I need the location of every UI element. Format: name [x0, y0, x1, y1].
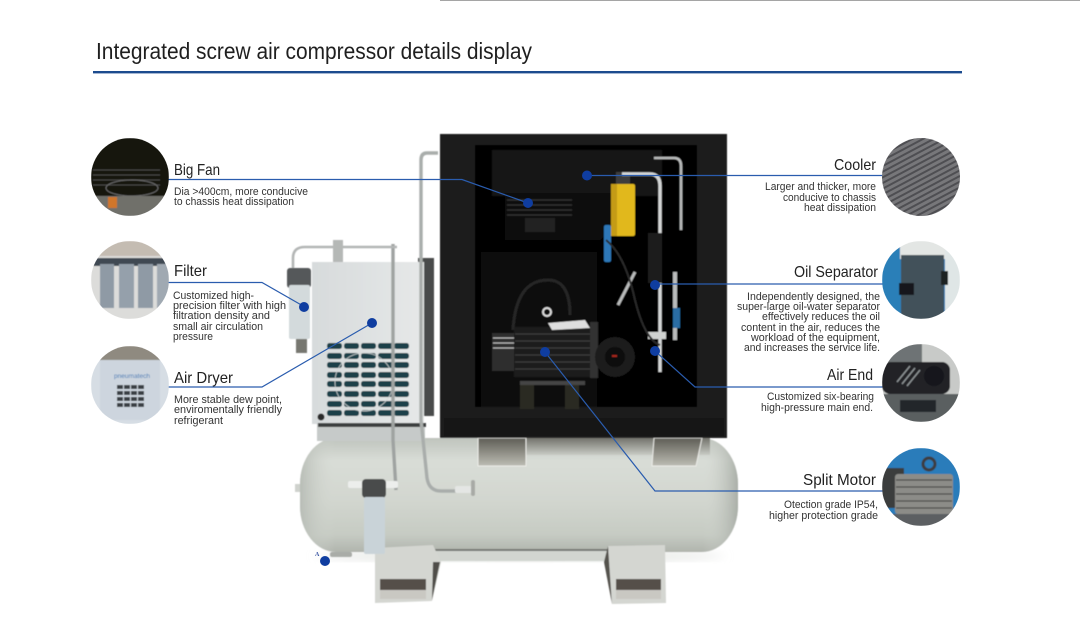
text: split motor description: Otection grade IP54,: [784, 499, 878, 511]
line: cooler: [587, 174, 883, 176]
air dryer: [312, 258, 434, 441]
stray letter mark: A: [315, 552, 320, 558]
heading: air end: Air End: [827, 367, 873, 384]
drain fitting: [455, 480, 475, 496]
line: split motor: [545, 352, 883, 491]
icon: oil separator photo: [882, 241, 960, 319]
inline filter: [287, 268, 311, 353]
callout lines: [168, 176, 883, 491]
bright pipes: [622, 174, 660, 372]
text: air end description: [761, 391, 874, 414]
line: oil separator: [655, 283, 883, 285]
text: cooler description: Larger and thicker, more: [765, 181, 876, 193]
icon: filter photo: [91, 241, 169, 319]
title underline: [93, 71, 962, 73]
panel: air end: [761, 344, 960, 422]
heading: filter: Filter: [174, 263, 208, 280]
motor: [492, 308, 635, 409]
text: air dryer description: enviromentally friendly: [174, 404, 282, 416]
text: big fan description: [174, 186, 308, 208]
text: air dryer description: More stable dew point,: [174, 394, 282, 406]
callout dots: [299, 170, 660, 566]
left foot: [375, 545, 441, 603]
dot: air dryer: [367, 318, 377, 328]
icon: air dryer photo: [91, 346, 169, 424]
upper black plate: [492, 150, 662, 196]
panel: big fan: [91, 138, 308, 216]
air tank: [295, 438, 738, 561]
motor cable: [513, 280, 570, 330]
dot: filter: [299, 302, 309, 312]
fan: [505, 193, 615, 240]
icon: air dryer photo: pneumatech: [114, 374, 150, 380]
text: filter description: small air circulation: [173, 321, 263, 333]
text: cooler description: heat dissipation: [804, 202, 876, 214]
text: air end description: high-pressure main end.: [761, 402, 873, 414]
panel: air dryer: [91, 346, 282, 427]
air compressor machine: [287, 134, 738, 604]
icon: air end photo: [882, 344, 960, 422]
text: oil separator description: content in the air, reduces the: [741, 322, 880, 334]
heading: air dryer: Air Dryer: [174, 370, 234, 387]
text: oil separator description: super-large oil-water separator: [737, 301, 880, 313]
text: split motor description: higher protection grade: [769, 510, 878, 522]
text: air dryer description: refrigerant: [174, 415, 223, 427]
top pipework: [293, 247, 397, 277]
front vertical pipe: [393, 244, 396, 490]
dot: oil separator: [650, 280, 660, 290]
text: cooler description: [765, 181, 876, 214]
text: filter description: [173, 290, 286, 343]
long vertical pipe: [421, 153, 470, 491]
dot: cooler: [582, 170, 592, 180]
text: filter description: pressure: [173, 331, 213, 343]
dryer vent slots: [327, 343, 409, 416]
text: oil separator description: [737, 291, 880, 354]
heading: big fan: Big Fan: [174, 162, 220, 179]
tank filter: [348, 479, 398, 554]
text: air end description: Customized six-bearing: [767, 391, 874, 403]
text: big fan description: to chassis heat dissipation: [174, 196, 294, 208]
text: split motor description: [769, 499, 878, 522]
yellow oil filter: [611, 172, 635, 236]
text: oil separator description: and increases the service life.: [744, 342, 880, 354]
right foot: [604, 545, 666, 604]
dot: air end: [650, 346, 660, 356]
title: Integrated screw air compressor details display: [96, 38, 532, 64]
cabinet body: [440, 134, 727, 438]
text: big fan description: Dia >400cm, more conducive: [174, 186, 308, 198]
text: oil separator description: effectively reduces the oil: [762, 311, 880, 323]
icon: big fan photo: [91, 138, 169, 216]
line: air dryer: [168, 323, 372, 387]
heading: split motor: Split Motor: [803, 472, 877, 489]
dot: stray marker: [320, 556, 330, 566]
cabinet brackets: [478, 438, 702, 466]
dot: split motor: [540, 347, 550, 357]
line: filter: [168, 282, 304, 306]
panel: cooler: [765, 138, 960, 216]
motor back plate: [481, 252, 597, 407]
panel: filter: [91, 241, 286, 343]
heading: cooler: Cooler: [834, 157, 877, 174]
text: cooler description: conducive to chassis: [783, 192, 876, 204]
blue component: [604, 225, 611, 262]
floor shadow: [315, 552, 725, 560]
text: filter description: Customized high-: [173, 290, 254, 302]
heading: oil separator: Oil Separator: [794, 264, 879, 281]
text: air dryer description: [174, 394, 282, 427]
panel: oil separator: [737, 241, 960, 354]
line: air end: [655, 351, 883, 387]
icon: split motor photo: [882, 448, 960, 526]
icon: cooler photo: [882, 138, 960, 216]
text: oil separator description: Independently designed, the: [747, 291, 880, 303]
text: oil separator description: workload of the equipment,: [750, 332, 880, 344]
cabinet shadow on tank: [480, 438, 710, 455]
panel: split motor: [769, 448, 960, 526]
text: filter description: precision filter with high: [173, 300, 286, 312]
line: big fan: [168, 180, 528, 203]
text: filter description: filtration density and: [173, 310, 270, 322]
dot: big fan: [523, 198, 533, 208]
